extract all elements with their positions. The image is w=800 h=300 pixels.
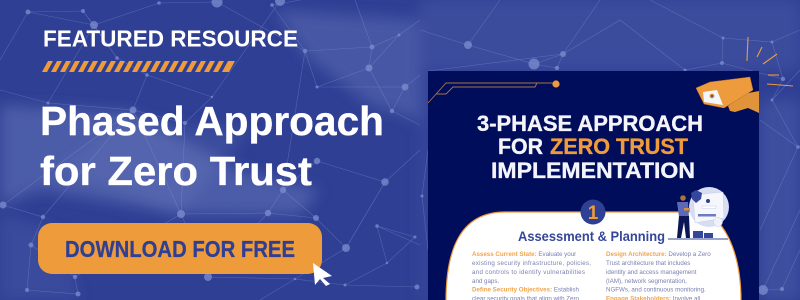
phase number badge — [580, 200, 606, 224]
phase heading: Assessment & Planning — [518, 228, 665, 244]
right column text: (IAM), network segmentation, — [606, 278, 687, 285]
icon: camera signal rays — [747, 37, 793, 86]
icon: security camera — [696, 77, 759, 113]
icon: mouse cursor — [313, 263, 332, 286]
headline: for Zero Trust — [40, 148, 312, 194]
left column text: Assess Current State: Evaluate your — [472, 251, 576, 258]
phase card — [446, 200, 741, 300]
preview title: FOR — [498, 134, 543, 159]
phase number badge: 1 — [588, 203, 599, 224]
right column text — [606, 251, 711, 300]
circuit decoration — [428, 80, 560, 103]
headline — [40, 98, 384, 194]
right column text: identity and access management — [606, 269, 697, 276]
preview title: IMPLEMENTATION — [491, 158, 695, 183]
preview title — [477, 111, 703, 183]
infographic preview panel — [428, 71, 759, 300]
left column text: existing security infrastructure, policies, — [472, 260, 591, 267]
stripe divider — [42, 61, 235, 72]
left column text: and gaps. — [472, 278, 499, 285]
right column text: Trust architecture that includes — [606, 260, 690, 267]
preview title: ZERO TRUST — [550, 134, 689, 159]
left column text: Define Security Objectives: Establish — [472, 286, 580, 294]
heading: featured resource: FEATURED RESOURCE — [43, 26, 298, 52]
download button — [38, 223, 322, 274]
headline: Phased Approach — [40, 98, 384, 144]
download button: DOWNLOAD FOR FREE — [65, 236, 295, 262]
illustration: person with login screen — [668, 187, 729, 240]
left column text: and controls to identify vulnerabilities — [472, 269, 585, 276]
preview title: 3-PHASE APPROACH — [477, 111, 703, 136]
right column text: Design Architecture: Develop a Zero — [606, 251, 711, 258]
left column text — [472, 251, 591, 300]
right column text: NGFWs, and continuous monitoring. — [606, 286, 706, 294]
